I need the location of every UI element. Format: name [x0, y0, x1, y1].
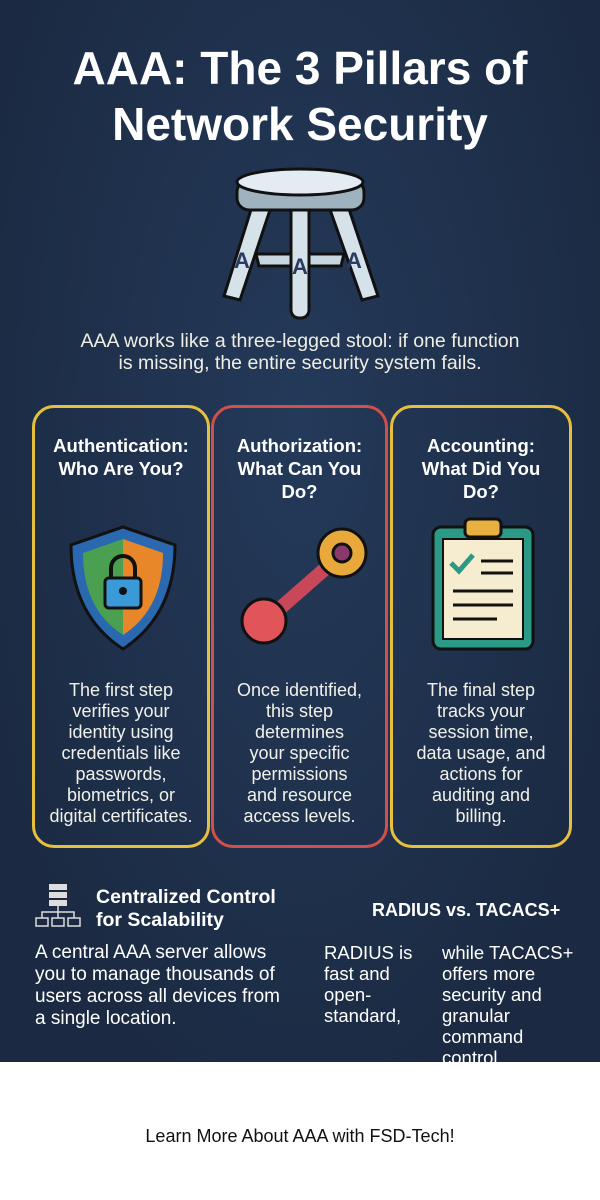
panel: authentication: Who Are You? [58, 458, 184, 479]
intro text: is missing, the entire security system fails. [118, 352, 482, 374]
heading: centralized control [96, 886, 276, 931]
icon: server network [35, 884, 81, 927]
panel: authorization: determines [255, 722, 344, 742]
panel: authorization: Once identified, [237, 680, 362, 700]
panel: accounting: data usage, and [416, 743, 546, 763]
text: radius: standard, [324, 1005, 401, 1026]
text: centralized [35, 942, 280, 1029]
text: tacacs: offers more [442, 963, 535, 984]
icon: key [240, 528, 368, 644]
title: Network Security [112, 98, 488, 150]
intro text [80, 330, 520, 374]
panel: authentication [32, 405, 210, 848]
text: centralized: users across all devices from [35, 986, 280, 1007]
icon: stool [222, 168, 380, 320]
panel: authentication: credentials like [61, 743, 181, 763]
text: radius: open- [324, 984, 371, 1005]
panel: accounting: tracks your [437, 701, 525, 721]
title [73, 42, 528, 150]
panel: accounting: Accounting: [427, 435, 535, 456]
panel: authorization: your specific [249, 743, 350, 763]
panel: authentication: biometrics, or [67, 785, 175, 805]
panel: accounting: session time, [428, 722, 534, 742]
text: tacacs: control. [442, 1047, 503, 1068]
icon: clipboard [432, 518, 534, 650]
panel: authorization [211, 405, 388, 848]
panel: authentication: digital certificates. [49, 806, 193, 826]
panel: authentication: verifies your [72, 701, 170, 721]
panel: accounting: auditing and [432, 785, 530, 805]
intro text: AAA works like a three-legged stool: if one function [80, 330, 520, 352]
heading: centralized control: for Scalability [96, 909, 224, 931]
text: radius: fast and [324, 963, 390, 984]
panel: accounting: Do? [463, 481, 499, 502]
text: tacacs: command [442, 1026, 523, 1047]
panel: authorization: permissions [251, 764, 348, 784]
panel: accounting: billing. [455, 806, 507, 826]
panel: authorization: this step [266, 701, 333, 721]
text: tacacs [442, 942, 573, 1068]
panel: authorization: and resource [247, 785, 352, 805]
title: AAA: The 3 Pillars of [73, 42, 527, 94]
panel: authorization: access levels. [243, 806, 356, 826]
text: tacacs: while TACACS+ [442, 942, 573, 963]
text: tacacs: granular [442, 1005, 510, 1026]
text: tacacs: security and [442, 984, 542, 1005]
text: centralized: you to manage thousands of [35, 964, 275, 985]
text: centralized: a single location. [35, 1008, 177, 1029]
panel: authentication: The first step [69, 680, 173, 700]
icon: stool: A [346, 248, 362, 273]
panel: authentication: Authentication: [53, 435, 189, 456]
panel: accounting: actions for [439, 764, 523, 784]
panel: authentication: identity using [68, 722, 174, 742]
heading: centralized control: Centralized Control [96, 886, 276, 908]
panel: authorization: Authorization: [237, 435, 362, 456]
heading: radius vs tacacs: RADIUS vs. TACACS+ [372, 900, 560, 920]
icon: stool: A [292, 254, 308, 279]
text: radius [324, 942, 412, 1026]
panel: accounting: What Did You [422, 458, 540, 479]
panel: authorization: Do? [282, 481, 317, 502]
footer link text: Learn More About AAA with FSD-Tech! [145, 1126, 455, 1146]
icon: shield [70, 526, 176, 651]
text: radius: RADIUS is [324, 942, 412, 963]
panel: accounting [390, 405, 572, 848]
panel: authentication: passwords, [75, 764, 167, 784]
text: centralized: A central AAA server allows [35, 942, 266, 963]
panel: authorization: What Can You [238, 458, 361, 479]
panel: accounting: The final step [427, 680, 535, 700]
icon: stool: A [234, 248, 250, 273]
